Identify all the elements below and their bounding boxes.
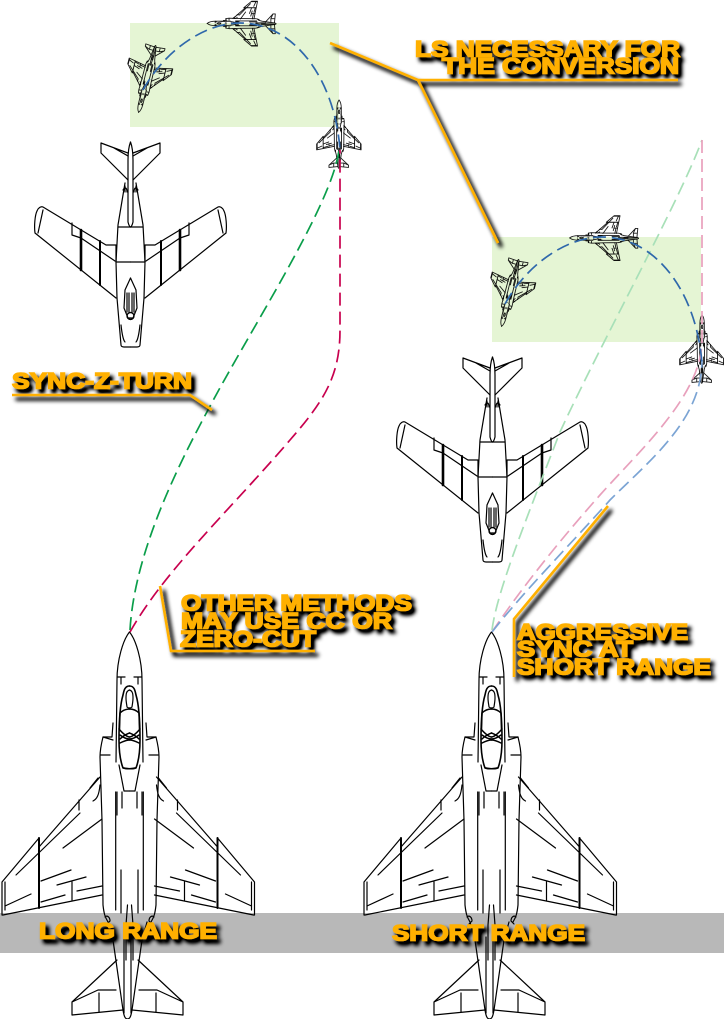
callout: LS necessary for the conversion: THE CONVERSION — [442, 54, 679, 78]
grey band behind range labels — [0, 913, 724, 953]
pale green path: short range — [492, 140, 702, 630]
pale blue path: short range — [492, 360, 702, 632]
crimson path: other methods — [130, 150, 340, 632]
label: long range: LONG RANGE — [39, 918, 217, 944]
long range fighter jet — [2, 632, 254, 1019]
small jet: conversion top, long range — [207, 1, 276, 46]
blue arc: long range conversion — [143, 23, 340, 150]
callout: other methods — [160, 586, 412, 652]
callout: sync-Z-turn: SYNC-Z-TURN — [12, 368, 192, 394]
LS zone: long range — [130, 23, 339, 127]
LS zone: short range — [492, 237, 701, 342]
small jet: conversion end, short range — [480, 254, 540, 332]
label: short range: SHORT RANGE — [392, 920, 585, 946]
callout: aggressive sync at short range — [514, 506, 711, 680]
callout: sync-Z-turn — [12, 368, 212, 410]
green path: sync-Z-turn — [130, 150, 339, 630]
small jet: conversion start, long range — [317, 100, 361, 168]
target aircraft: short range — [397, 357, 588, 562]
blue arc: short range conversion — [505, 237, 702, 364]
pale pink path: short range — [492, 140, 702, 632]
callout: LS necessary for the conversion — [330, 36, 680, 243]
callout: aggressive sync at short range: SYNC AT — [517, 636, 634, 662]
short range fighter jet — [364, 632, 616, 1019]
target aircraft: long range — [35, 142, 226, 347]
small jet: conversion top, short range — [570, 216, 639, 261]
callout: other methods: OTHER METHODS — [181, 590, 412, 616]
small jet: conversion start, short range — [680, 315, 724, 383]
callout: aggressive sync at short range: AGGRESSIVE — [517, 620, 688, 644]
small jet: conversion end, long range — [117, 40, 177, 118]
callout: aggressive sync at short range: SHORT RANGE — [517, 654, 711, 680]
callout: other methods: ZERO-CUT — [180, 626, 317, 652]
callout: LS necessary for the conversion: LS NECESSARY FOR — [415, 36, 680, 62]
callout: other methods: MAY USE CC OR — [181, 608, 392, 634]
